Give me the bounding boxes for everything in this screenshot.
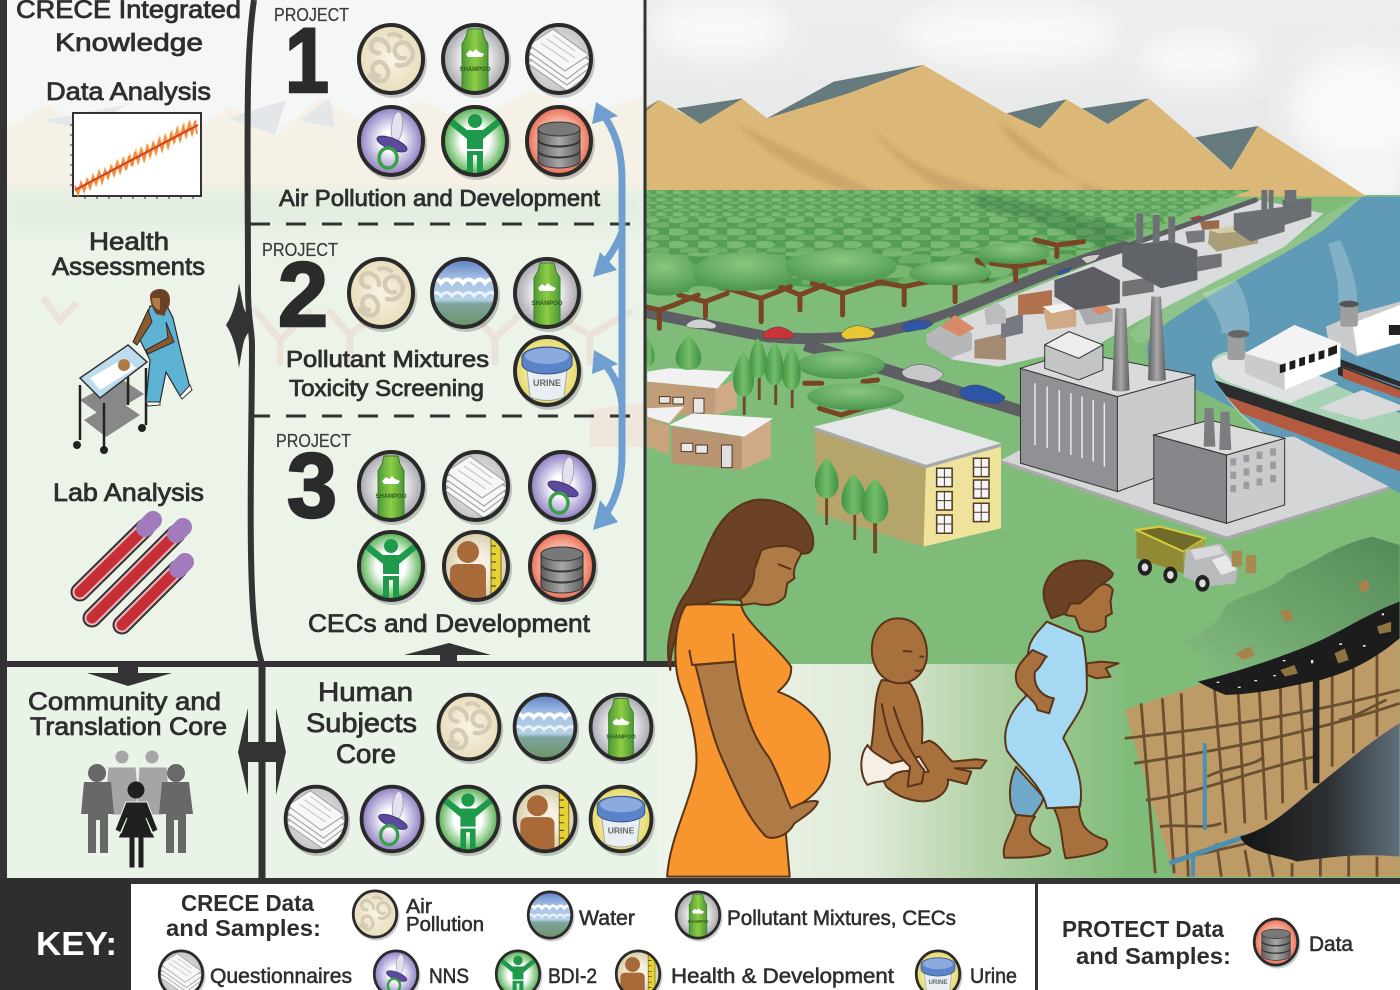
icon: BDI-2 <box>359 532 427 605</box>
project 3 label <box>276 431 351 537</box>
icon: urine <box>591 787 655 856</box>
smoke <box>1202 240 1357 335</box>
project 1 title: Air Pollution and Development <box>279 185 601 211</box>
pale foreground band <box>645 664 1130 878</box>
icon: health and development <box>444 530 512 605</box>
project 2 title <box>286 346 489 401</box>
project 3 label: 3 <box>287 435 337 537</box>
icon: questionnaires <box>444 452 512 525</box>
key item: questionnaires: Questionnaires <box>210 965 352 988</box>
cars <box>686 216 1202 404</box>
key item: BDI-2 <box>496 951 597 990</box>
key item: air pollution <box>353 891 484 941</box>
river <box>1147 197 1400 493</box>
panel: Community and Translation Core <box>28 688 227 868</box>
icon: pacifier NNS <box>362 787 426 856</box>
icon: nurse with bassinet <box>73 289 192 454</box>
baby <box>861 618 986 801</box>
icon: shampoo <box>515 259 583 332</box>
panel: key <box>0 878 1400 990</box>
Health Assessments label: Assessments <box>52 253 205 281</box>
icon: shampoo <box>359 452 427 525</box>
small factory <box>1154 408 1285 523</box>
key item: urine: Urine <box>970 965 1017 988</box>
core title <box>28 688 227 741</box>
arrow: down to Community Core <box>87 664 172 686</box>
Health Assessments label: Health <box>89 228 169 256</box>
Lab Analysis label: Lab Analysis <box>53 479 204 507</box>
key item: water <box>527 892 635 942</box>
icon: air pollution <box>349 259 417 332</box>
houses in town <box>926 190 1311 360</box>
key item: NNS <box>374 951 469 990</box>
dump truck <box>1136 527 1256 592</box>
icon: BDI-2 <box>443 107 511 180</box>
icon: air pollution <box>359 25 427 98</box>
brown houses <box>647 368 773 470</box>
icon: questionnaires <box>286 787 350 856</box>
project 2 title: Toxicity Screening <box>289 375 484 401</box>
project 1 label: 1 <box>285 10 329 112</box>
Health Assessments label <box>52 228 205 281</box>
arrow: up to projects <box>404 643 491 664</box>
panel: Project 1 <box>274 5 601 211</box>
CRECE data heading <box>166 890 321 941</box>
core title: Subjects <box>306 708 417 738</box>
cypress trees <box>644 335 888 553</box>
arrow: to Integrated Knowledge <box>226 283 251 368</box>
roads <box>650 200 1256 339</box>
factory pad <box>1001 437 1389 537</box>
toddler <box>1004 560 1118 858</box>
panel: Project 2 <box>262 240 583 410</box>
key item: data: Data <box>1309 933 1353 956</box>
key item: NNS: NNS <box>429 965 469 988</box>
project 2 label <box>262 240 338 346</box>
panel: faded landscape behind CRECE panels <box>7 0 645 664</box>
sky with clouds <box>645 0 1400 200</box>
icon: data <box>527 107 595 180</box>
project 1 label <box>274 5 349 112</box>
icon: questionnaires <box>527 25 595 98</box>
key item: BDI-2: BDI-2 <box>548 965 597 988</box>
key item: water: Water <box>579 907 635 930</box>
core title <box>306 677 417 769</box>
scatter plot chart <box>70 113 201 199</box>
icon: water <box>430 259 500 332</box>
mine cross-section <box>1125 537 1400 877</box>
PROTECT data heading: and Samples: <box>1076 943 1231 969</box>
ground <box>645 195 1400 878</box>
arrow: double between cores <box>238 708 286 795</box>
town pad <box>950 200 1324 367</box>
core title: Core <box>336 739 396 769</box>
heading <box>16 0 241 57</box>
icon: pacifier NNS <box>359 107 427 180</box>
panel frame lines <box>0 0 685 880</box>
forest <box>645 190 1251 293</box>
project 2 title: Pollutant Mixtures <box>286 346 489 372</box>
key item: data <box>1254 919 1353 969</box>
icon: pacifier NNS <box>530 452 598 525</box>
core title: Human <box>318 677 413 707</box>
key item: pollutant mixtures <box>676 892 956 942</box>
heading: Knowledge <box>55 29 203 57</box>
KEY heading: KEY: <box>36 925 117 962</box>
icon: BDI-2 <box>438 787 502 856</box>
key item: urine <box>916 951 1017 990</box>
mountains <box>642 65 1367 197</box>
pregnant woman <box>667 500 830 877</box>
icon: group of people <box>81 750 193 868</box>
ship <box>1212 301 1400 487</box>
panel: Project 3 <box>276 431 598 638</box>
icon: shampoo <box>591 695 655 764</box>
project 2 label: PROJECT <box>262 240 338 260</box>
key item: health and development: Health & Development <box>671 965 894 988</box>
PROTECT data heading: PROTECT Data <box>1062 916 1224 942</box>
big acacia trees <box>629 240 1084 415</box>
icon: urine <box>515 337 583 410</box>
big power plant <box>1020 297 1195 492</box>
CRECE data heading: and Samples: <box>166 915 321 941</box>
key item: air pollution: Pollution <box>406 914 484 936</box>
key item: air pollution: Air <box>406 896 432 918</box>
CRECE data heading: CRECE Data <box>181 890 314 916</box>
core title: Community and <box>28 688 221 716</box>
icon: health and development <box>515 785 579 856</box>
project 2 label: 2 <box>278 244 328 346</box>
panel: CRECE Integrated Knowledge column <box>16 0 241 625</box>
scene: landscape illustration <box>629 0 1400 878</box>
icon: air pollution <box>439 695 503 764</box>
Data Analysis label: Data Analysis <box>46 78 211 106</box>
panel: Human Subjects Core <box>286 677 655 856</box>
yellow apartment building <box>814 408 1001 547</box>
icon: water <box>513 695 579 764</box>
key item: questionnaires <box>159 951 352 990</box>
PROTECT data heading <box>1062 916 1231 969</box>
panel: bottom row background <box>7 664 658 878</box>
project 3 label: PROJECT <box>276 431 351 451</box>
core title: Translation Core <box>30 713 227 741</box>
key item: health and development <box>616 950 894 990</box>
project 1 label: PROJECT <box>274 5 349 25</box>
project 3 title: CECs and Development <box>308 610 590 638</box>
key item: pollutant mixtures: Pollutant Mixtures, CECs <box>727 907 956 930</box>
icon: data <box>530 532 598 605</box>
icon: blood tubes <box>80 520 185 625</box>
icon: shampoo <box>443 25 511 98</box>
arrow: blue project links <box>592 102 622 530</box>
